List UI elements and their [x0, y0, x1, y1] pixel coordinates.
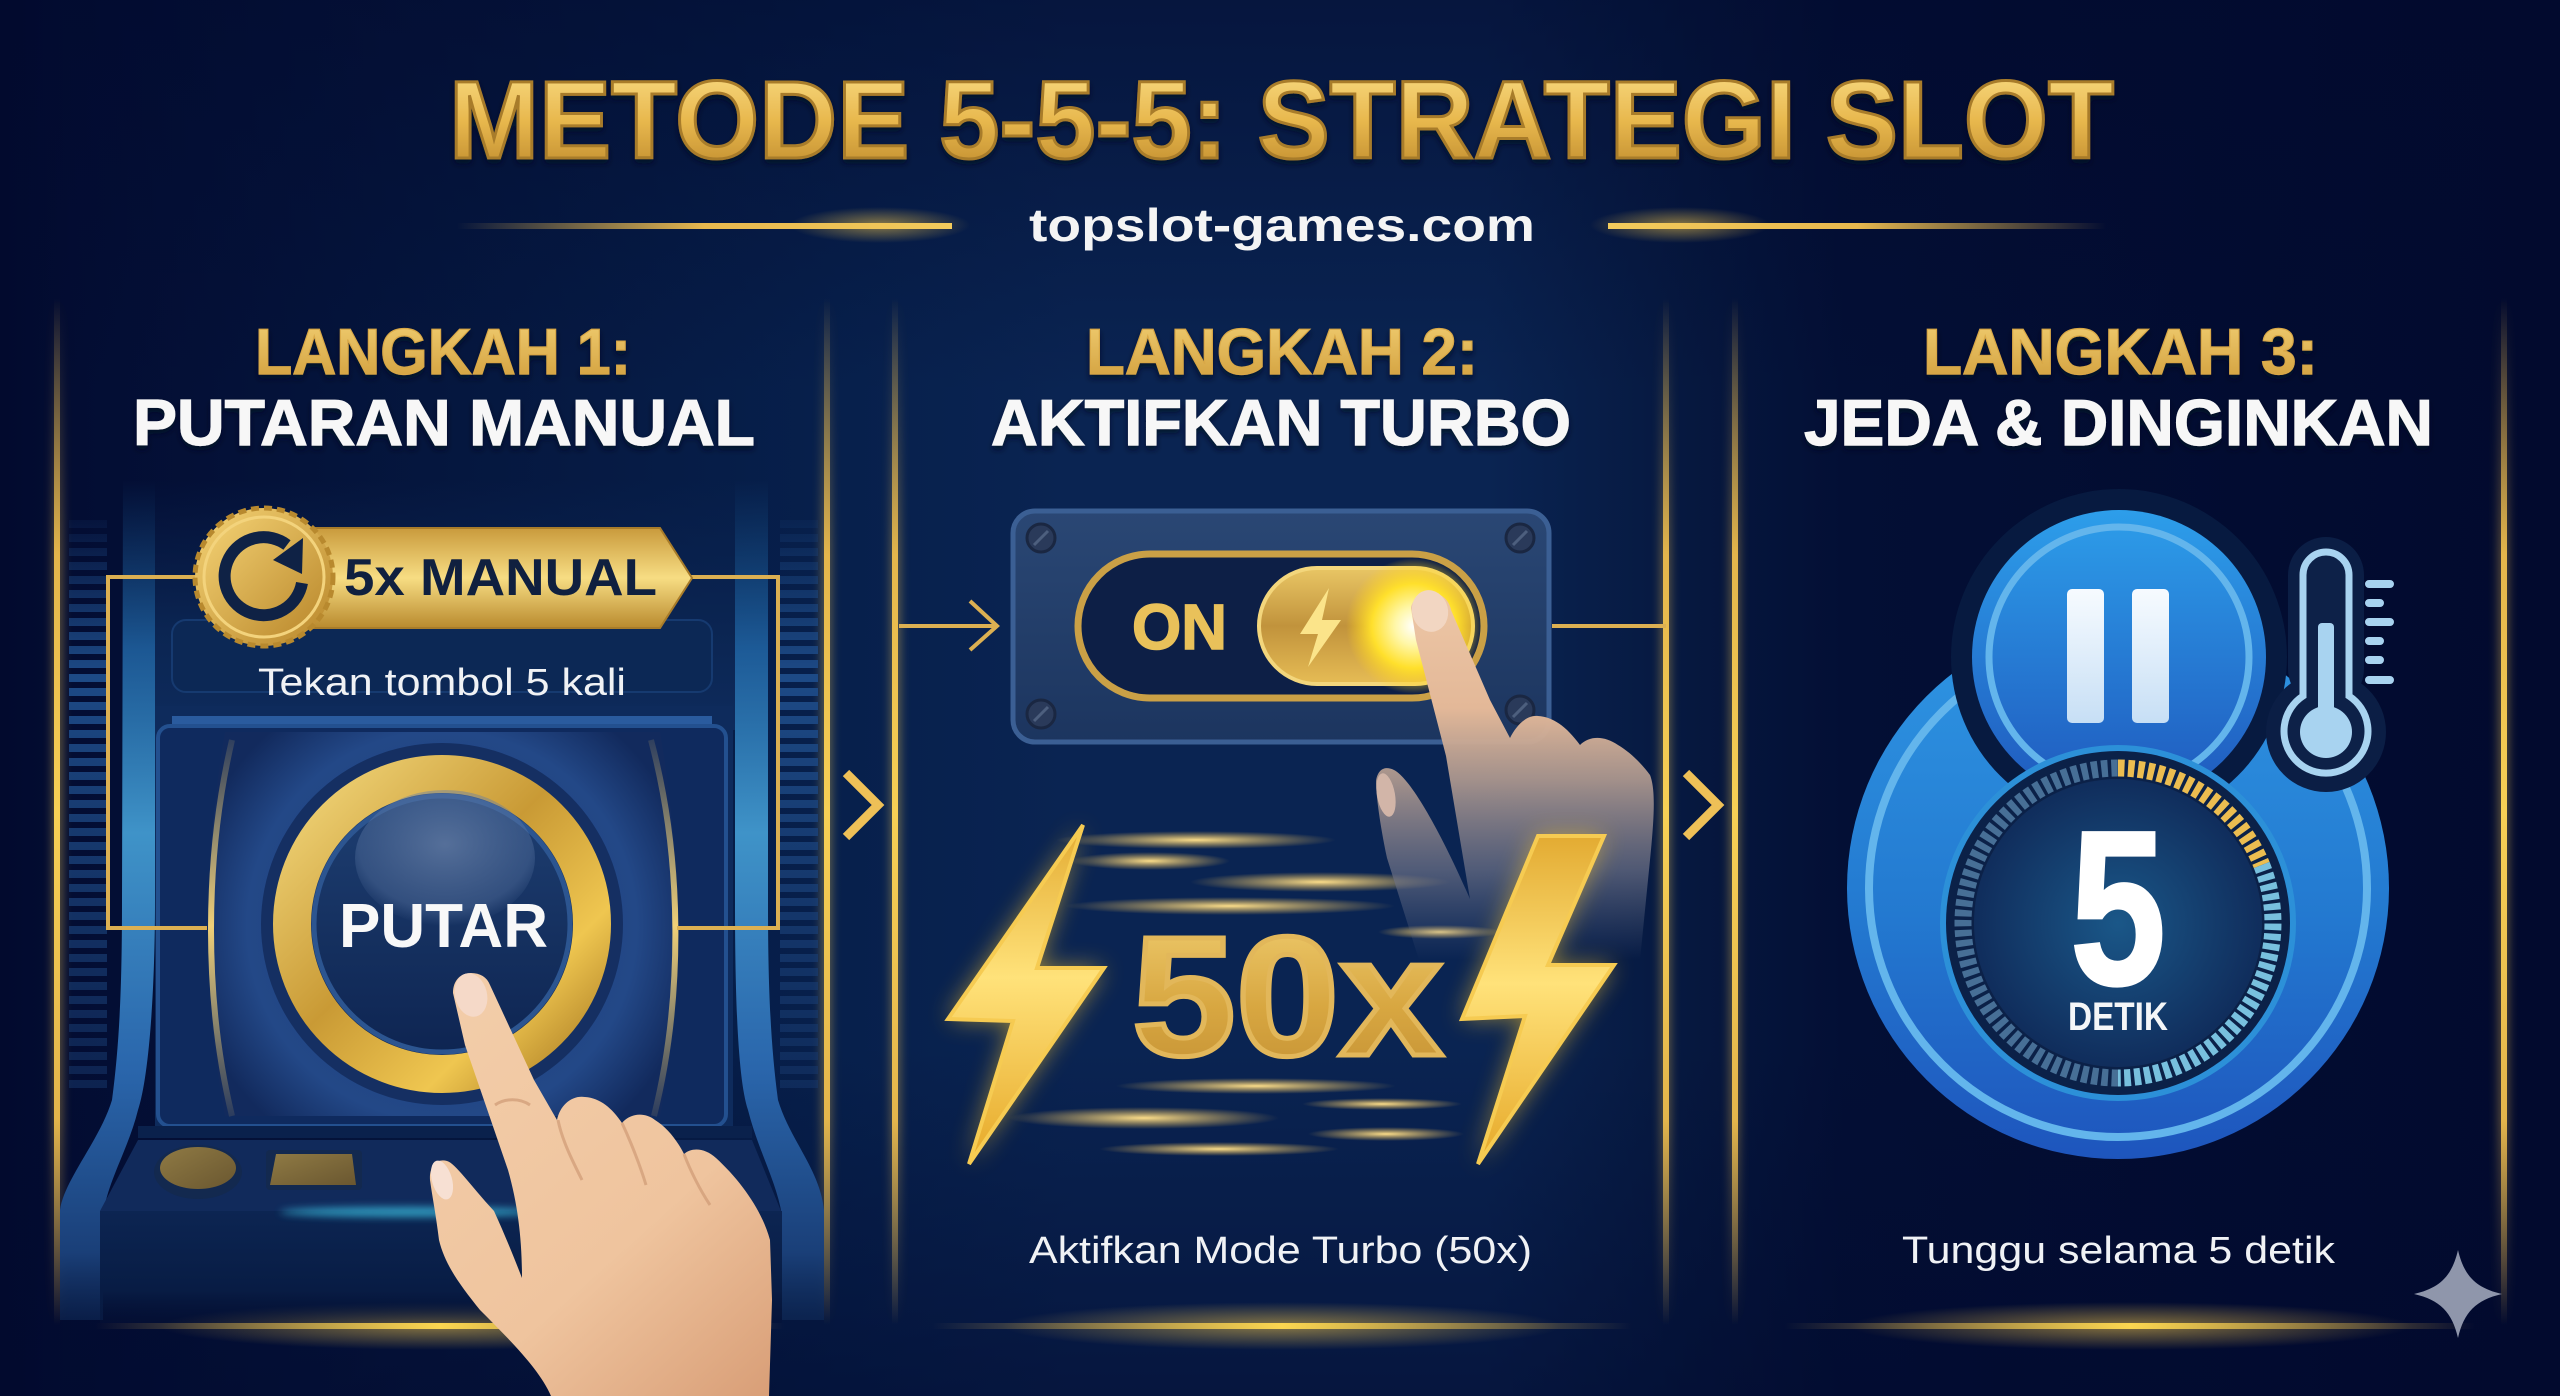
- heading: step 2: [991, 315, 1571, 459]
- chevron: step 1 to 2: [846, 773, 878, 837]
- panel: step 2 turbo: [899, 315, 1666, 1272]
- website url: topslot-games.com: [1029, 199, 1535, 251]
- icon: hand pressing: [427, 970, 772, 1396]
- teal light: [280, 1207, 540, 1217]
- pause button: [1972, 510, 2266, 804]
- title: METODE 5-5-5: STRATEGI SLOT: [449, 59, 2114, 182]
- turbo streaks: [1009, 831, 1502, 1156]
- heading: step 1: PUTARAN MANUAL: [133, 386, 755, 459]
- button: putar: PUTAR: [339, 892, 548, 961]
- panel frame lines: [53, 298, 2508, 1350]
- icon: sparkle watermark: [2414, 1250, 2502, 1338]
- chevron: step 2 to 3: [1686, 773, 1718, 837]
- button: putar: [261, 743, 623, 1105]
- turbo switch plate: ON: [1132, 591, 1227, 663]
- heading: step 3: LANGKAH 3:: [1923, 315, 2318, 388]
- big blue disc: [1847, 617, 2389, 1159]
- coin slot: [154, 1145, 242, 1199]
- badge: 5x manual: 5x MANUAL: [344, 549, 657, 607]
- caption: press 5 times: Tekan tombol 5 kali: [258, 662, 626, 704]
- heading: step 1: [133, 315, 755, 459]
- heading: step 2: AKTIFKAN TURBO: [991, 386, 1571, 459]
- icon: thermometer: [2266, 537, 2390, 792]
- hand on switch: [1373, 586, 1654, 960]
- heading: step 3: JEDA & DINGINKAN: [1804, 386, 2433, 459]
- caption: activate turbo: Aktifkan Mode Turbo (50x): [1029, 1230, 1532, 1272]
- badge: 5x manual: [195, 508, 692, 646]
- timer dial: 5: [2070, 785, 2166, 1031]
- bill slot: [266, 1150, 362, 1190]
- heading: step 2: LANGKAH 2:: [1086, 315, 1478, 388]
- timer dial: [1940, 745, 2296, 1101]
- connector line: [1552, 624, 1666, 628]
- bolts and 50x: 50x: [1132, 902, 1443, 1092]
- illustration: slot machine: [60, 480, 824, 1323]
- heading: step 1: LANGKAH 1:: [255, 315, 631, 388]
- caption: wait 5 seconds: Tunggu selama 5 detik: [1902, 1230, 2336, 1272]
- icon: circular arrow: [225, 537, 303, 615]
- timer dial: DETIK: [2068, 995, 2168, 1039]
- panel: step 3 pause and cool: [1804, 315, 2433, 1272]
- heading: step 3: [1804, 315, 2433, 459]
- connector frame: [108, 577, 778, 928]
- arrow: into switch: [899, 601, 997, 650]
- cutout: [1951, 489, 2287, 825]
- panel: step 1 manual spin: [60, 315, 824, 1396]
- turbo switch plate: [1013, 511, 1549, 742]
- bolts and 50x: [948, 825, 1614, 1164]
